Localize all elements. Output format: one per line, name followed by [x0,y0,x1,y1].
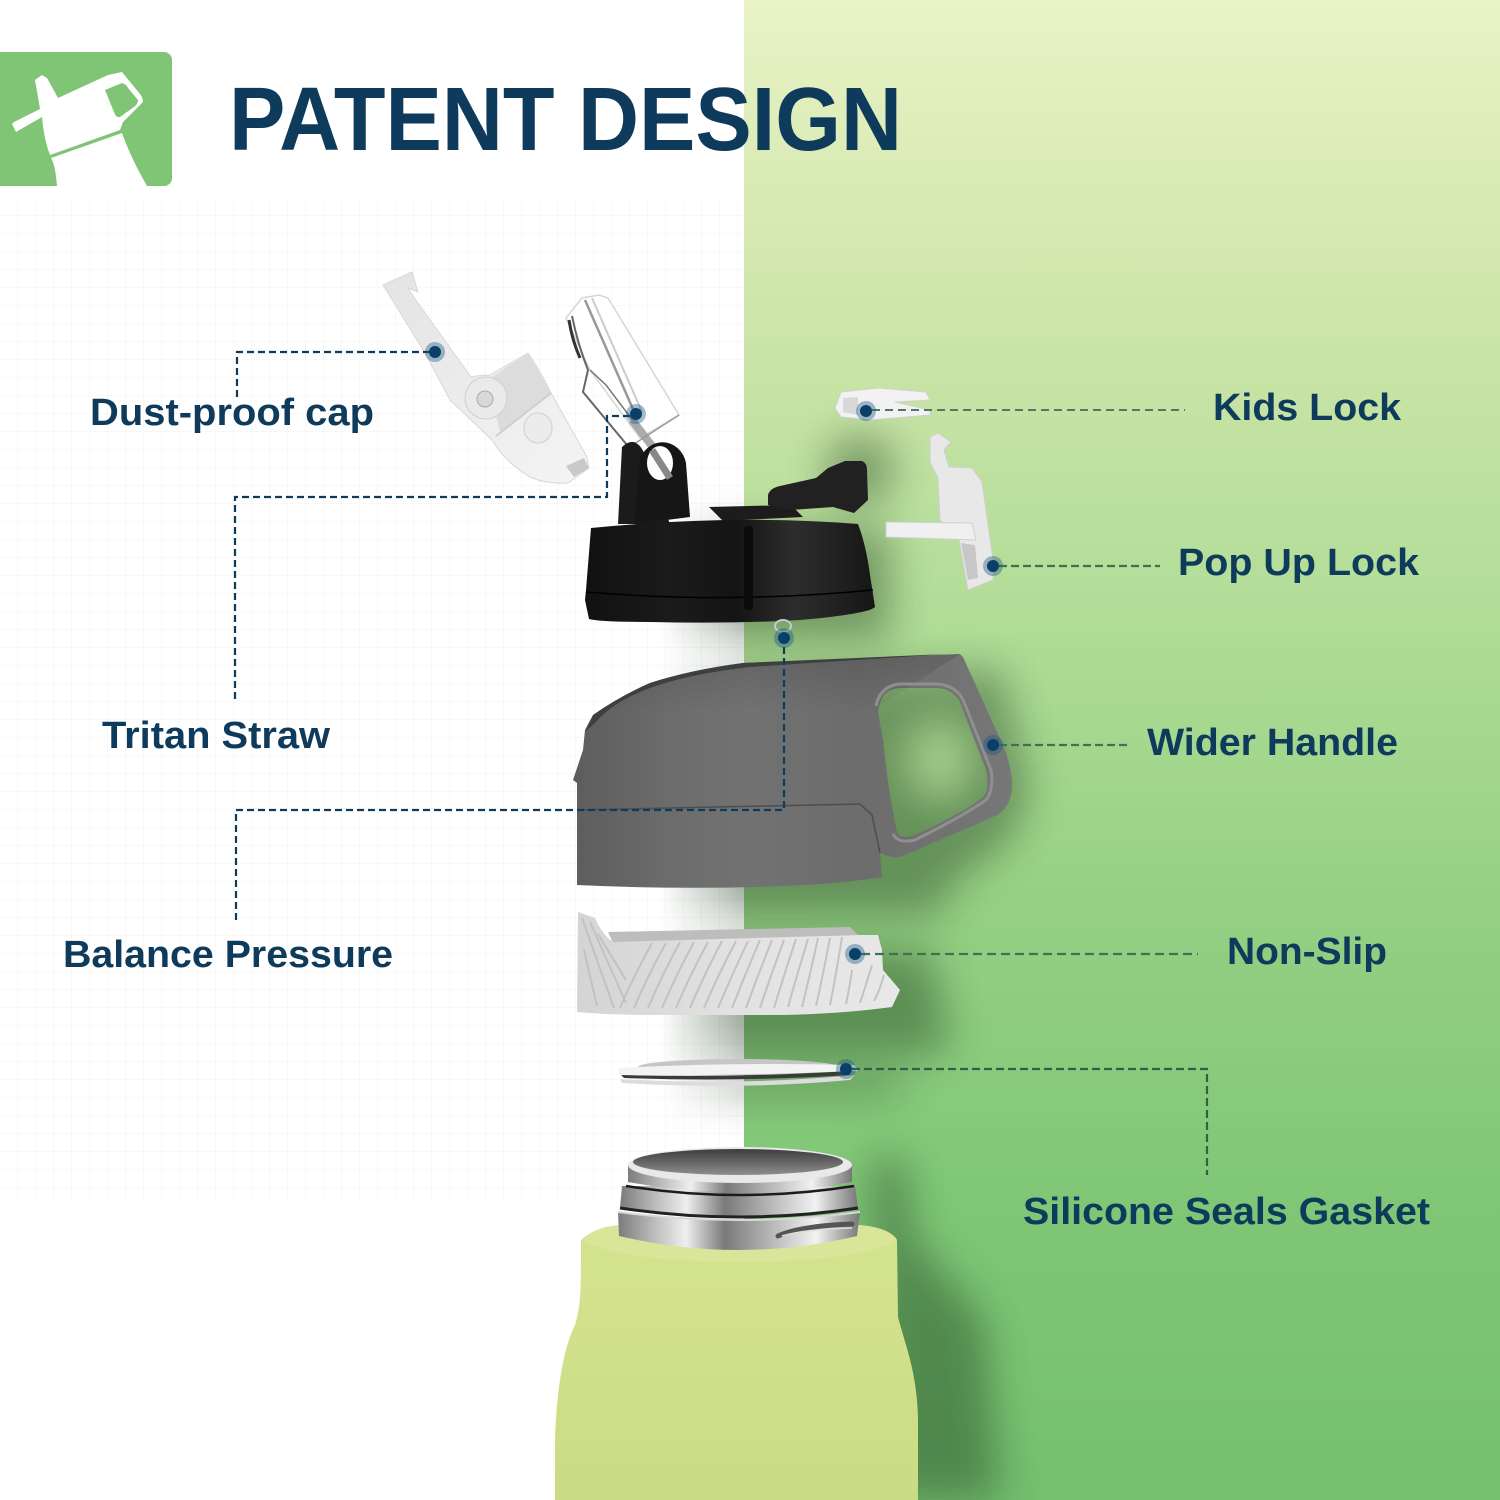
callout: balance pressure line [236,628,794,920]
part: black lid [585,442,875,623]
light patch seen through the handle [906,718,974,802]
label: Dust-proof cap: Dust-proof cap [90,392,374,434]
title: PATENT DESIGN [229,70,902,170]
label: Balance Pressure: Balance Pressure [63,934,393,976]
label: Non-Slip: Non-Slip [1227,931,1387,973]
callout: Tritan straw line [235,404,646,699]
part: pop up lock [886,433,993,590]
label: Silicone Seals Gasket: Silicone Seals Gasket [1023,1191,1430,1233]
part: grey handle [573,654,1012,888]
label: Pop Up Lock: Pop Up Lock [1178,542,1420,584]
callout: dust-proof cap line [237,342,445,397]
background: white grid panel [0,0,744,1500]
label: Kids Lock: Kids Lock [1213,387,1402,429]
callout: kids lock line [856,401,1185,421]
callout: silicone gasket line [836,1059,1207,1175]
label: Wider Handle: Wider Handle [1147,722,1398,764]
callout: non-slip line [845,944,1198,964]
part: non-slip ring [577,912,900,1015]
callout: wider handle line [983,735,1127,755]
icon: bottle badge [0,52,172,186]
part: kids lock [835,388,930,420]
bottle neck: steel thread [618,1147,860,1250]
part: dust-proof cap [383,272,589,483]
background: green gradient panel [744,0,1500,1500]
bottle body [555,1225,918,1500]
part: Tritan straw [566,295,679,472]
part: silicone gasket [619,1059,857,1086]
soft shadows behind parts [625,435,1030,1500]
callout: pop up lock line [983,556,1160,576]
part: pressure valve ring [775,620,791,632]
label: Tritan Straw: Tritan Straw [102,715,330,757]
